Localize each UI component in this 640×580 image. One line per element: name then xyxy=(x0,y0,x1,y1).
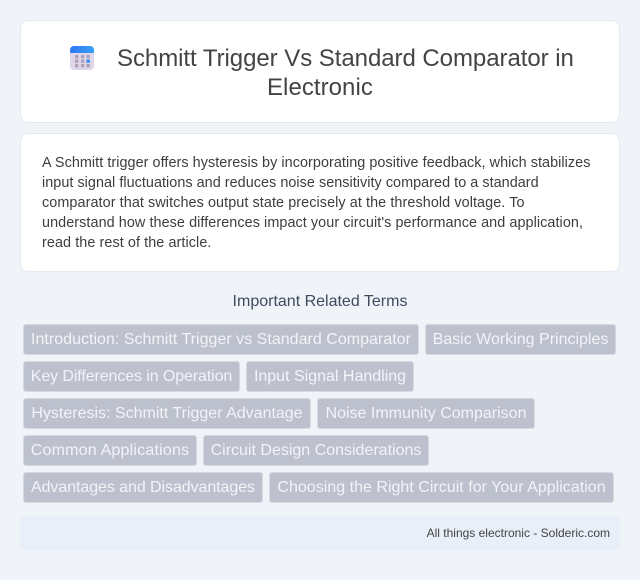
text block: description: A Schmitt trigger offers hysteresis by incorporating positive feedback, which stabilizes xyxy=(42,155,590,171)
panel: description card xyxy=(20,133,620,272)
tag xyxy=(269,472,614,503)
tag: Common Applications xyxy=(31,442,189,459)
tag: Input Signal Handling xyxy=(254,368,406,385)
tag xyxy=(425,324,616,355)
tag xyxy=(23,324,419,355)
tag: Advantages and Disadvantages xyxy=(31,479,255,496)
title: Schmitt Trigger Vs Standard Comparator in xyxy=(117,45,574,72)
tag: Basic Working Principles xyxy=(433,331,608,348)
text block: description xyxy=(42,155,590,251)
tag xyxy=(23,398,311,429)
tag: Key Differences in Operation xyxy=(31,368,232,385)
tag xyxy=(23,472,263,503)
text block: description: read the rest of the article. xyxy=(42,235,212,251)
tag: Choosing the Right Circuit for Your Application xyxy=(277,479,606,496)
tag xyxy=(203,435,429,466)
title xyxy=(117,45,574,101)
tag xyxy=(23,361,240,392)
panel: related term tags xyxy=(23,324,616,503)
text block: description: understand how these differences impact your circuit's performance and application, xyxy=(42,215,583,231)
tag: Noise Immunity Comparison xyxy=(326,405,526,422)
icon: calendar xyxy=(70,46,94,70)
tag xyxy=(317,398,535,429)
tag xyxy=(23,435,197,466)
heading: important related terms: Important Related Terms xyxy=(233,293,407,310)
footer xyxy=(20,516,620,550)
tag: Hysteresis: Schmitt Trigger Advantage xyxy=(31,405,303,422)
text block: description: input signal fluctuations and reduces noise sensitivity compared to a standard xyxy=(42,175,539,191)
title: Electronic xyxy=(267,74,373,101)
tag xyxy=(246,361,414,392)
footer text: All things electronic - Solderic.com xyxy=(427,526,610,540)
panel: title card xyxy=(20,20,620,123)
text block: description: comparator that switches output state precisely at the threshold voltage. To xyxy=(42,195,525,211)
tag: Introduction: Schmitt Trigger vs Standard Comparator xyxy=(31,331,411,348)
tag: Circuit Design Considerations xyxy=(211,442,421,459)
